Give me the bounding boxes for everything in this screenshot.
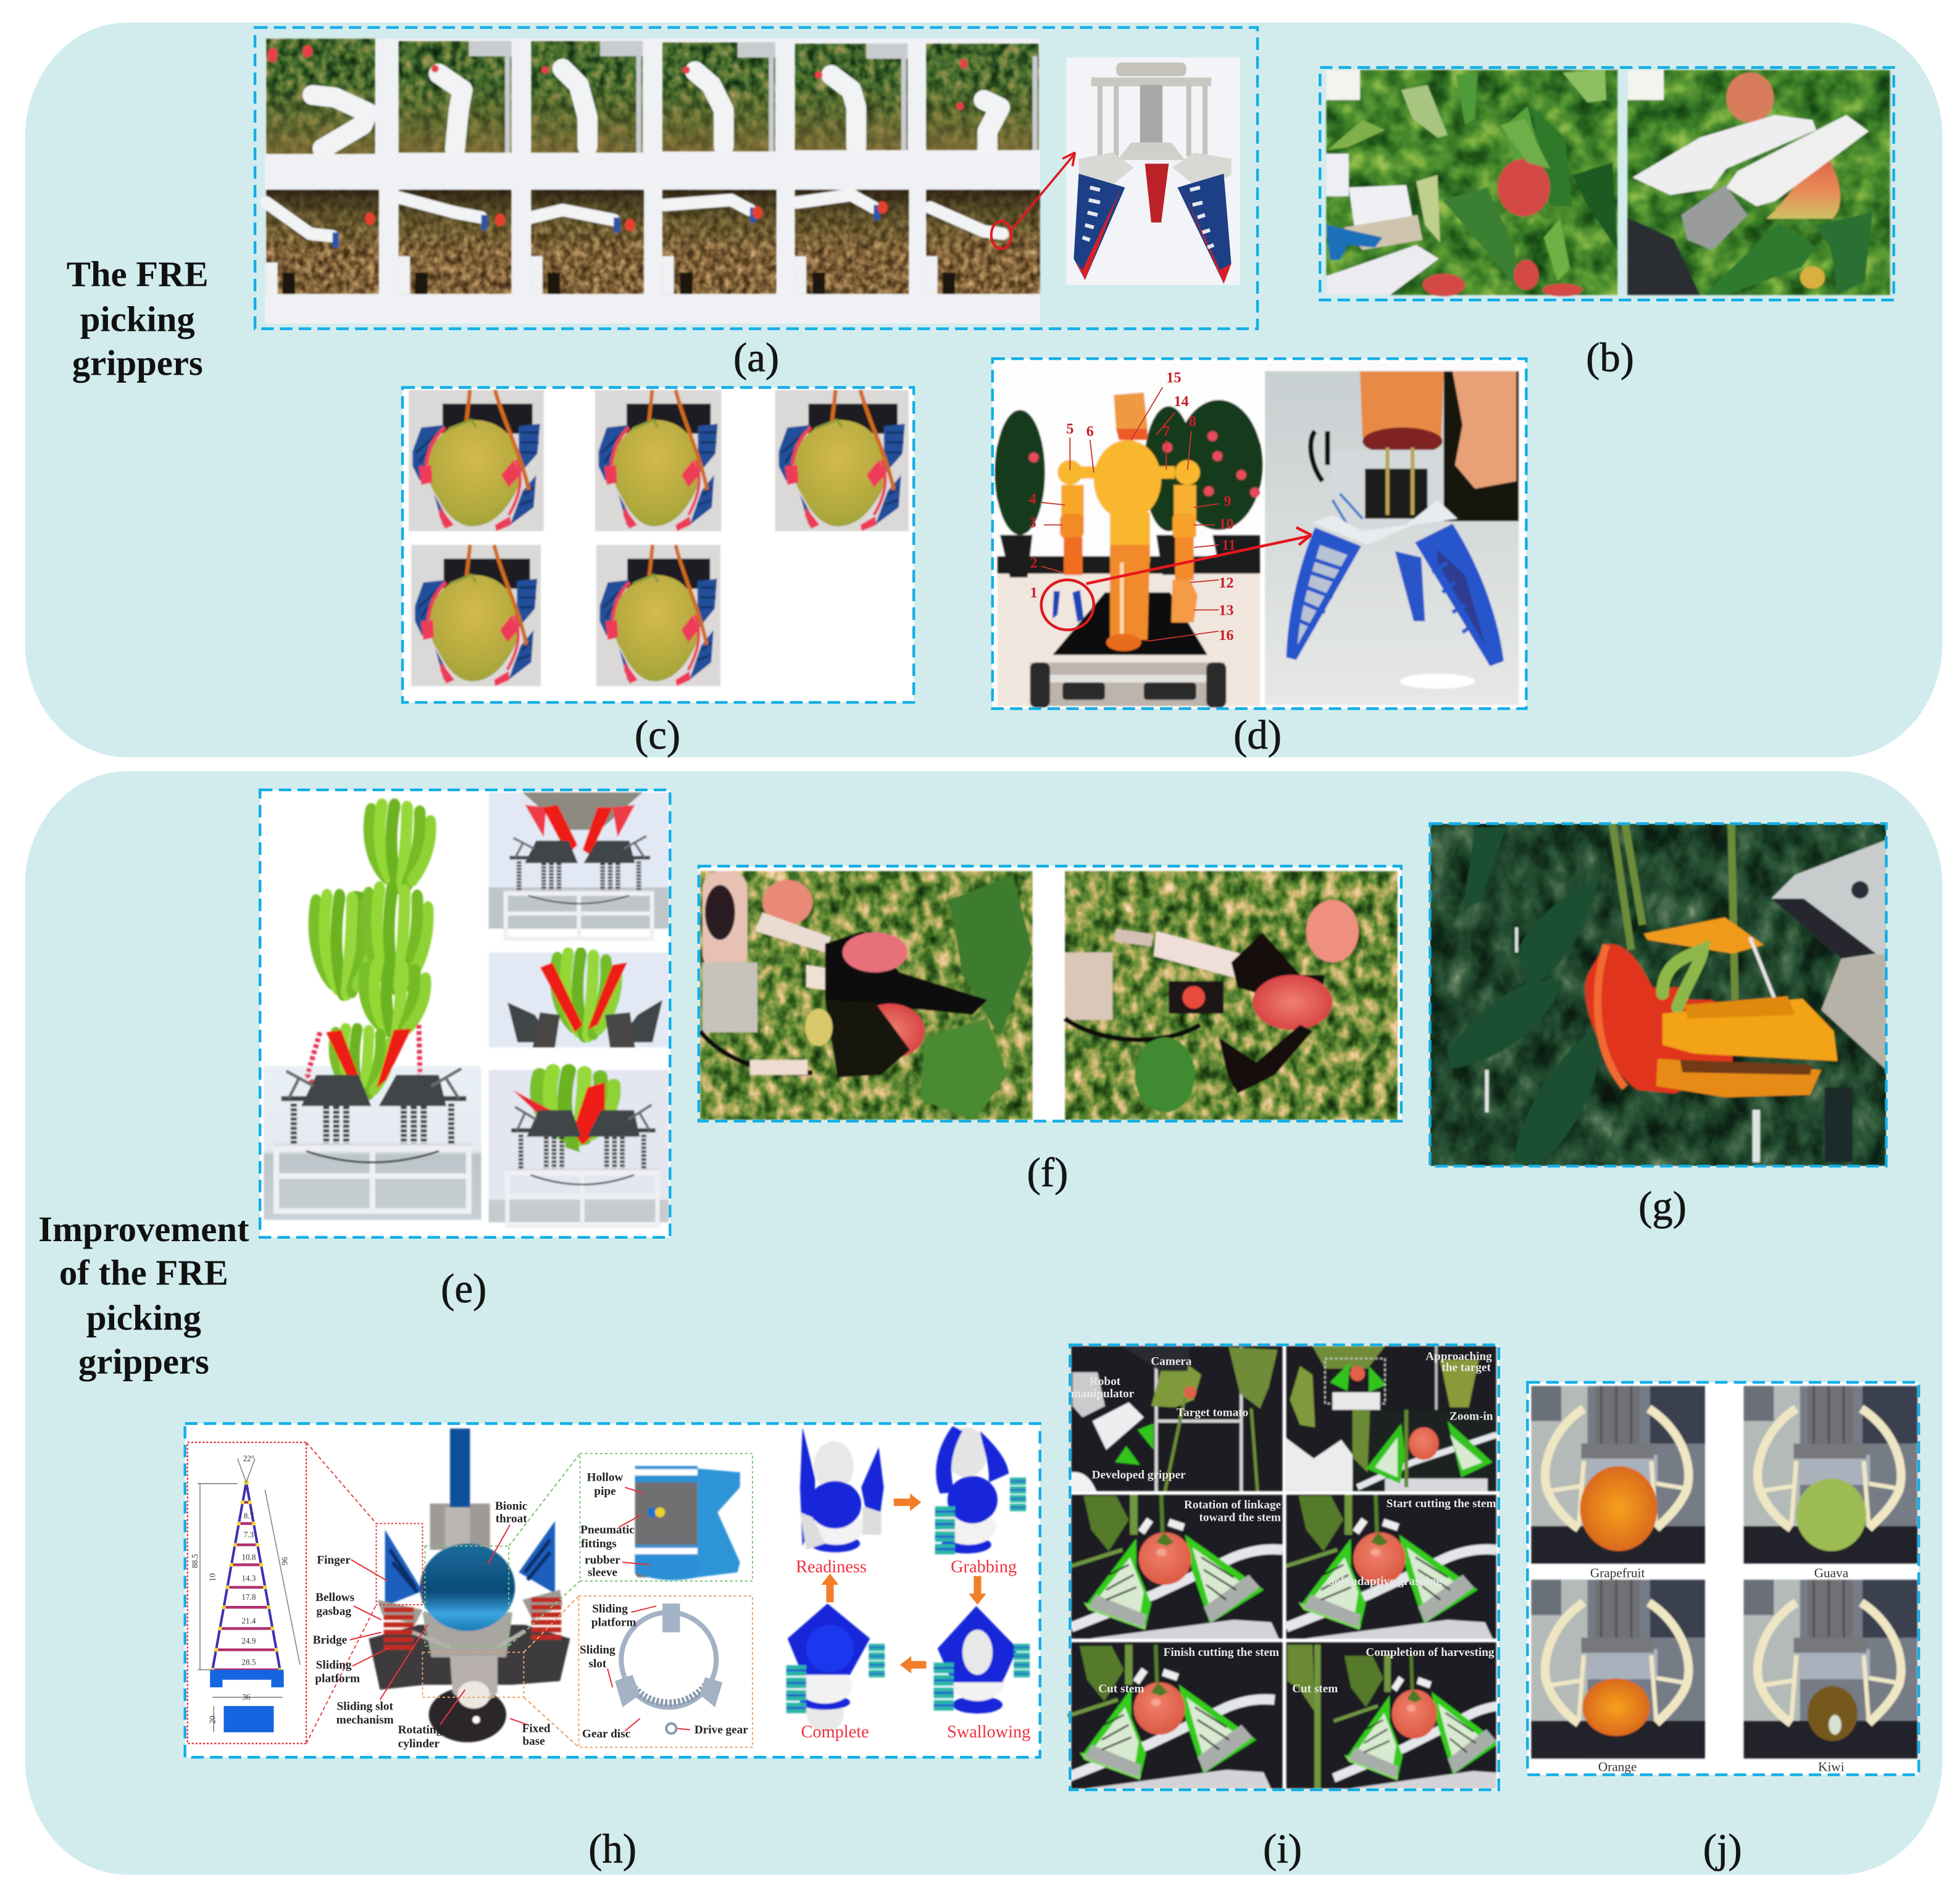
part labels: slot xyxy=(588,1657,607,1670)
numbered callouts: 11 xyxy=(1222,537,1236,554)
finger dimension drawing: 17.8 xyxy=(241,1592,256,1602)
part labels: throat xyxy=(496,1513,527,1526)
figure j: fruit grasping tiles xyxy=(1527,1382,1919,1775)
numbered callouts: 3 xyxy=(1028,515,1036,531)
figure a: orchard picking sequence xyxy=(255,28,1257,329)
step labels: Cut stem xyxy=(1098,1682,1144,1695)
caption j: (j) xyxy=(1703,1826,1742,1871)
panel: the FRE picking grippers xyxy=(25,22,1943,758)
step labels: Rotation of linkage xyxy=(1184,1499,1281,1511)
step labels: manipulator xyxy=(1071,1387,1135,1400)
step labels: Zoom-in xyxy=(1449,1410,1493,1423)
numbered callouts: 2 xyxy=(1030,554,1038,571)
three finger gripper close-up xyxy=(1066,57,1240,285)
numbered callouts: 13 xyxy=(1219,602,1234,618)
finger dimension drawing xyxy=(188,1442,376,1744)
orange tile xyxy=(1531,1580,1705,1758)
heading: The FRE picking grippers: picking xyxy=(80,299,195,339)
numbered callouts: 12 xyxy=(1219,575,1234,591)
fruit names xyxy=(1590,1566,1849,1774)
finger dimension drawing: 8.7 xyxy=(244,1511,254,1520)
fruit names: Guava xyxy=(1814,1566,1849,1581)
heading: The FRE picking grippers: grippers xyxy=(72,343,203,383)
state labels: Readiness xyxy=(796,1558,867,1577)
state labels xyxy=(796,1558,1030,1742)
bell pepper xyxy=(1585,944,1732,1094)
bottom row photos xyxy=(266,190,1040,294)
gripper state: swallowing xyxy=(934,1606,1030,1713)
figure c: mango gripper tiles xyxy=(402,388,914,702)
bottom gripper xyxy=(1656,1058,1821,1097)
part labels: pipe xyxy=(594,1485,616,1498)
figure i: tomato harvesting sequence xyxy=(1067,1345,1516,1790)
numbered callouts: 5 xyxy=(1066,421,1074,438)
fruit names: Grapefruit xyxy=(1590,1566,1645,1581)
callout boxes xyxy=(376,1453,753,1747)
left photo apples xyxy=(1422,159,1582,296)
red circle and arrow xyxy=(1041,528,1311,630)
step labels: Approaching xyxy=(1425,1350,1492,1363)
right photo gripper xyxy=(1627,115,1872,295)
kiwi tile xyxy=(1744,1580,1917,1758)
middle right photo xyxy=(489,952,669,1047)
step labels: Robot xyxy=(1090,1375,1121,1388)
grapefruit tile xyxy=(1531,1386,1705,1563)
caption i: (i) xyxy=(1263,1826,1302,1871)
part labels: platform xyxy=(591,1616,636,1629)
heading: Improvement of the FRE picking grippers: grippers xyxy=(78,1342,209,1382)
left photo gripper xyxy=(1326,154,1439,295)
orange process arrows xyxy=(821,1494,986,1674)
part labels: Bridge xyxy=(313,1634,348,1647)
caption g: (g) xyxy=(1638,1183,1687,1229)
figure d: humanoid robot and gripper xyxy=(993,359,1526,709)
step labels: toward the stem xyxy=(1199,1511,1281,1524)
fruit names: Orange xyxy=(1598,1759,1637,1774)
finger dimension drawing: 96 xyxy=(280,1557,290,1565)
right photo subject xyxy=(1065,900,1359,1112)
finger dimension drawing: 20 xyxy=(207,1715,217,1724)
numbered callouts: 4 xyxy=(1028,491,1036,507)
gripper state: readiness xyxy=(800,1428,884,1552)
state labels: Complete xyxy=(801,1723,869,1742)
step labels: Cut stem xyxy=(1292,1682,1338,1695)
mini gripper xyxy=(1053,590,1084,622)
finger dimension drawing: 7.3 xyxy=(244,1530,254,1539)
red circle and arrow xyxy=(991,152,1075,249)
finger dimension drawing: 24.9 xyxy=(241,1636,256,1645)
part labels: Sliding xyxy=(316,1658,352,1671)
finger dimension drawing: 10.8 xyxy=(241,1552,256,1561)
step labels: Camera xyxy=(1151,1355,1192,1368)
part labels: platform xyxy=(315,1673,360,1686)
central gripper render xyxy=(369,1429,570,1742)
heading: Improvement of the FRE picking grippers: picking xyxy=(86,1298,201,1338)
gripper state: grabbing xyxy=(935,1426,1026,1553)
part labels: cylinder xyxy=(398,1737,440,1750)
part labels: Rotating xyxy=(398,1724,443,1737)
part labels: Bellows xyxy=(315,1591,355,1604)
part labels xyxy=(313,1471,748,1750)
finger dimension drawing: 36 xyxy=(242,1692,251,1702)
part labels: Hollow xyxy=(587,1471,623,1484)
part labels: base xyxy=(522,1735,545,1748)
figure b: apple gripper photos xyxy=(1320,67,1894,300)
device xyxy=(1771,840,1887,962)
part labels: mechanism xyxy=(336,1714,394,1727)
figure g: pepper gripper photo xyxy=(1430,824,1887,1166)
part labels: rubber xyxy=(585,1553,620,1566)
part labels: Sliding xyxy=(592,1602,628,1615)
step labels: Finish cutting the stem xyxy=(1164,1646,1279,1659)
caption e: (e) xyxy=(441,1266,486,1312)
step labels: Soft adaptive grasping xyxy=(1328,1575,1442,1588)
heading: Improvement of the FRE picking grippers: Improvement xyxy=(38,1209,249,1249)
figure h: bionic gripper diagram xyxy=(185,1424,1040,1757)
finger dimension drawing: 22° xyxy=(243,1453,254,1463)
finger dimension drawing: 88.5 xyxy=(190,1553,199,1568)
numbered callouts: 9 xyxy=(1224,493,1231,510)
middle row photos xyxy=(1071,1495,1283,1639)
state labels: Swallowing xyxy=(947,1723,1030,1742)
step labels: Completion of harvesting xyxy=(1366,1646,1495,1659)
heading: The FRE picking grippers: The FRE xyxy=(67,254,209,294)
finger dimension drawing: 14.3 xyxy=(241,1574,256,1583)
gripper state: complete xyxy=(786,1603,885,1732)
pepper leaves xyxy=(1448,828,1601,1165)
step labels: Target tomato xyxy=(1177,1406,1248,1419)
step labels: the target xyxy=(1441,1361,1491,1374)
step labels xyxy=(1071,1350,1496,1695)
second photo: approach and zoom-in xyxy=(1285,1346,1496,1491)
numbered callouts: 16 xyxy=(1219,627,1234,644)
numbered callouts: 6 xyxy=(1086,423,1094,440)
caption c: (c) xyxy=(635,712,680,758)
state labels: Grabbing xyxy=(951,1558,1017,1577)
numbered callouts: 1 xyxy=(1030,584,1038,601)
fruit names: Kiwi xyxy=(1818,1759,1845,1774)
bottom right photo xyxy=(489,1070,669,1226)
step labels: Developed gripper xyxy=(1092,1469,1186,1482)
top gripper xyxy=(1644,917,1764,954)
caption d: (d) xyxy=(1233,712,1282,758)
part labels: Fixed xyxy=(522,1723,551,1736)
left photo leaves xyxy=(1327,70,1617,290)
finger dimension drawing: 28.5 xyxy=(241,1657,256,1666)
part labels: gasbag xyxy=(316,1605,351,1618)
robot photo xyxy=(995,364,1262,707)
finger dimension drawing: 10 xyxy=(207,1573,217,1581)
left photo with bananas xyxy=(264,806,482,1220)
figure e: banana gripper xyxy=(260,790,670,1237)
numbered callouts: 8 xyxy=(1189,414,1196,430)
caption a: (a) xyxy=(733,335,779,380)
caption b: (b) xyxy=(1586,335,1634,380)
guava tile xyxy=(1744,1386,1917,1563)
numbered callouts: 10 xyxy=(1219,516,1234,533)
hollow pipe detail xyxy=(635,1466,740,1580)
top row photos xyxy=(266,39,1039,154)
caption f: (f) xyxy=(1027,1150,1068,1195)
part labels: Drive gear xyxy=(694,1724,748,1737)
left photo subject xyxy=(700,871,1033,1120)
part labels: sleeve xyxy=(588,1566,617,1579)
panel: improvement of the FRE picking grippers xyxy=(25,771,1943,1875)
numbered callouts: 7 xyxy=(1162,423,1170,440)
middle gripper xyxy=(1662,999,1838,1061)
numbered callouts xyxy=(1028,370,1236,644)
part labels: Bionic xyxy=(495,1500,528,1513)
figure f: apple gripper orchard photos xyxy=(699,866,1401,1121)
right photo fruit xyxy=(1726,72,1840,289)
numbered callouts: 15 xyxy=(1166,370,1181,386)
top right photo xyxy=(489,792,669,939)
ring gear detail xyxy=(615,1603,722,1734)
part labels: Gear disc xyxy=(582,1728,631,1740)
part labels: Sliding xyxy=(580,1644,615,1657)
part labels: Pneumatic xyxy=(580,1524,635,1537)
bottom row photos xyxy=(1071,1642,1283,1789)
caption h: (h) xyxy=(588,1826,636,1871)
gripper close-up photo xyxy=(1265,362,1520,705)
heading: Improvement of the FRE picking grippers: of the FRE xyxy=(59,1253,228,1293)
part labels: Finger xyxy=(317,1553,351,1566)
finger dimension drawing: 21.4 xyxy=(241,1616,256,1626)
step labels: Start cutting the stem xyxy=(1387,1497,1496,1510)
part labels: fittings xyxy=(581,1537,617,1550)
part labels: Sliding slot xyxy=(337,1700,394,1713)
numbered callouts: 14 xyxy=(1174,393,1189,410)
first photo: robot and plant xyxy=(1071,1346,1277,1491)
